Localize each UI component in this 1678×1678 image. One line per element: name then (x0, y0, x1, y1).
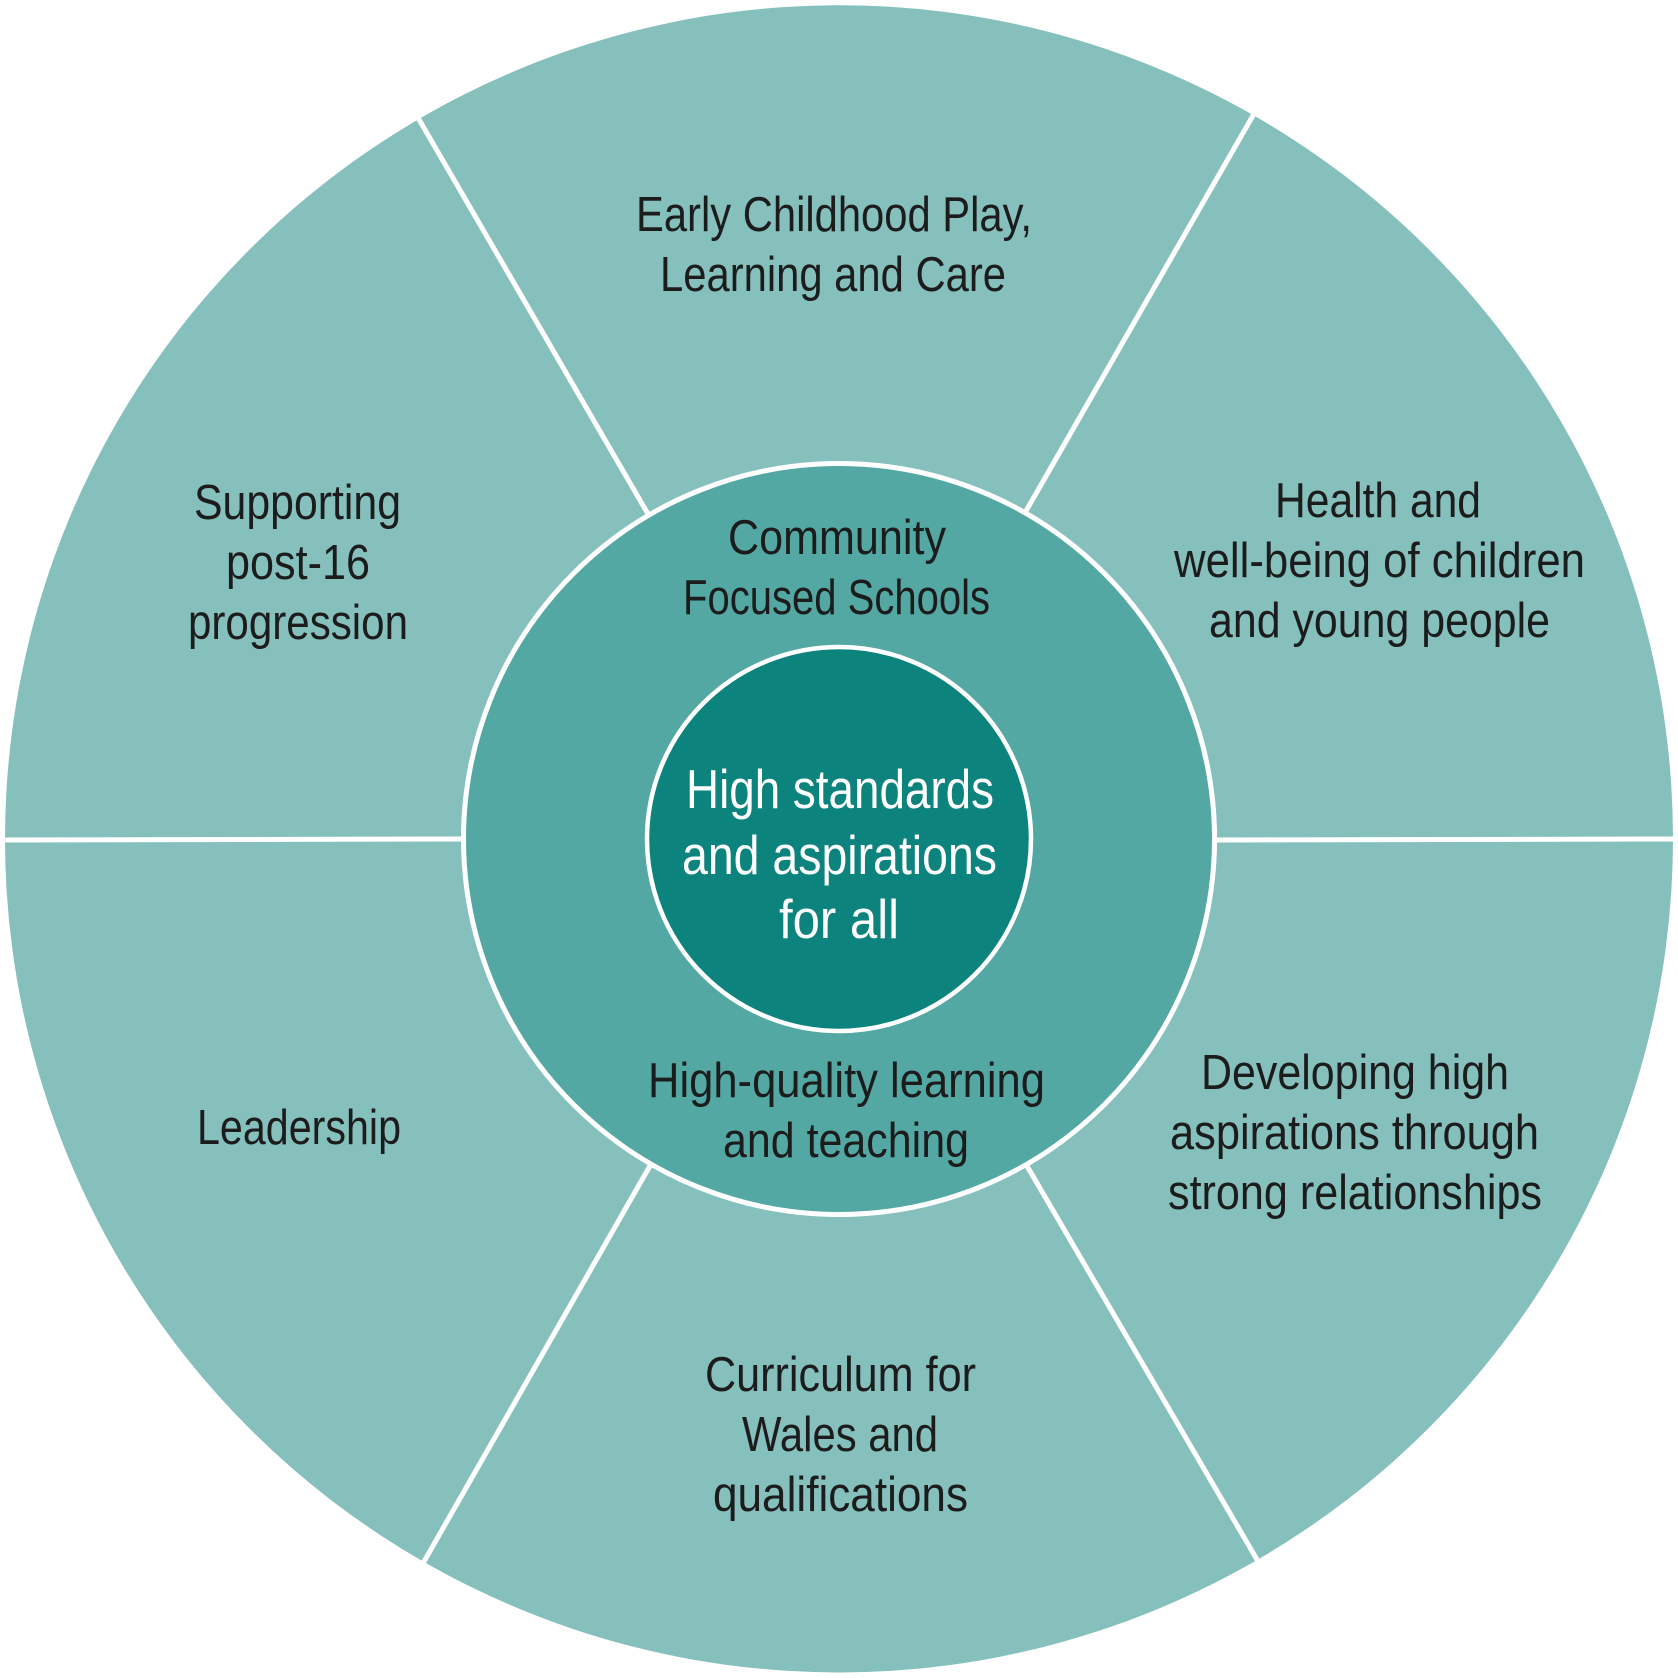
segment: Curriculum for Wales (424, 1164, 1257, 1672)
segment: Supporting post-16 progression: post-16 (226, 536, 370, 590)
segment: Curriculum for Wales: Wales and (742, 1408, 938, 1462)
segment: Early Childhood Play, Learning and Care (419, 5, 1253, 514)
segment: Leadership (5, 839, 651, 1562)
ring label: High-quality learning and teaching: High-quality learning (648, 1054, 1045, 1108)
centre circle (647, 647, 1031, 1031)
segment: Supporting post-16 progression: progression (188, 596, 408, 650)
segment: Health and well-being: and young people (1209, 594, 1550, 648)
segment: Developing high aspirations (1027, 838, 1673, 1560)
segment: Leadership: Leadership (197, 1101, 401, 1155)
centre circle: and aspirations (682, 824, 997, 886)
segment: Developing high aspirations: aspirations through (1170, 1106, 1539, 1160)
segment: Supporting post-16 progression (5, 119, 648, 840)
segment: Curriculum for Wales: Curriculum for (705, 1348, 976, 1402)
segment: Health and well-being (1026, 115, 1673, 840)
segment: Curriculum for Wales: qualifications (713, 1468, 968, 1522)
segment: Supporting post-16 progression: Supporting (194, 476, 401, 530)
segment: Health and well-being: Health and (1275, 474, 1481, 528)
middle ring (464, 464, 1214, 1214)
segment: Developing high aspirations: Developing high (1201, 1046, 1509, 1100)
segment: Early Childhood Play, Learning and Care: Learning and Care (660, 248, 1006, 302)
segment: Developing high aspirations: strong relationships (1168, 1166, 1542, 1220)
ring label: Community Focused Schools (683, 511, 990, 625)
centre circle: for all (779, 888, 899, 950)
ring label: High-quality learning and teaching (648, 1054, 1045, 1168)
centre circle: High standards (686, 758, 994, 820)
ring label: Community Focused Schools: Community (728, 511, 946, 565)
ring label: High-quality learning and teaching: and teaching (723, 1114, 969, 1168)
segment: Health and well-being: well-being of children (1173, 534, 1585, 588)
segment: Early Childhood Play, Learning and Care: Early Childhood Play, (636, 188, 1032, 242)
ring label: Community Focused Schools: Focused Schools (683, 571, 990, 625)
